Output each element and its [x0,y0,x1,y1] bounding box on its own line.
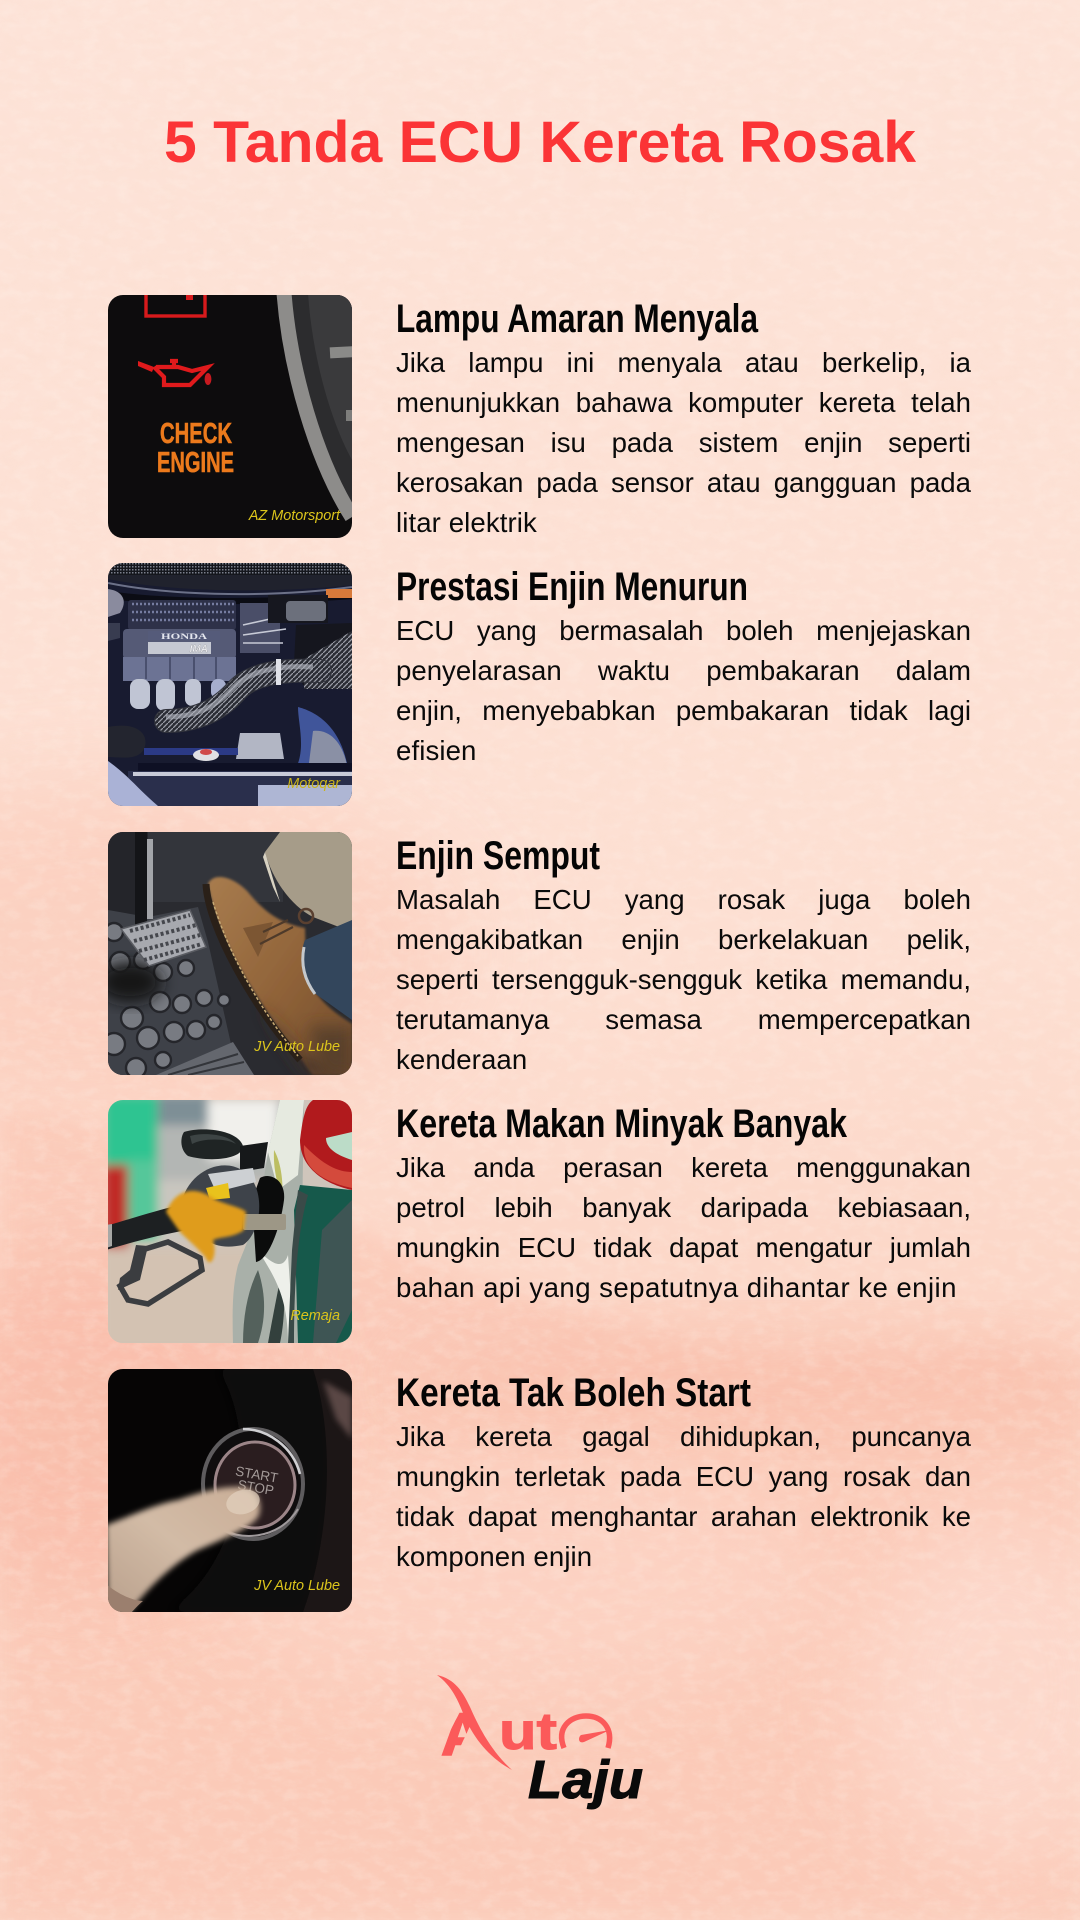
body text: Jika kereta gagal dihidupkan, puncanya [396,1421,971,1452]
heading: Prestasi Enjin Menurun [396,565,748,609]
body text: enjin, menyebabkan pembakaran tidak lagi [396,695,971,726]
photo: engine bay: IMA [190,644,208,655]
heading: Kereta Tak Boleh Start [396,1371,751,1415]
photo: engine bay: HONDA [161,632,207,641]
body text: efisien [396,735,476,766]
panel: prestasi enjin [108,563,971,806]
body text: Masalah ECU yang rosak juga boleh [396,884,971,915]
photo: check engine dashboard: ENGINE [157,447,234,479]
photo: foot on pedal: JV Auto Lube [253,1039,340,1055]
panel: tak boleh start [108,1369,971,1612]
body text: Jika lampu ini menyala atau berkelip, ia [396,347,971,378]
body text: mungkin terletak pada ECU yang rosak dan [396,1461,971,1492]
photo: fuel nozzle [108,1100,352,1343]
body text: terutamanya semasa mempercepatkan [396,1004,971,1035]
title: 5 Tanda ECU Kereta Rosak [164,110,917,175]
photo: foot on pedal [108,832,352,1075]
body text: mengakibatkan enjin berkelakuan pelik, [396,924,971,955]
body text: litar elektrik [396,507,537,538]
body text [396,1421,971,1572]
panel: enjin semput [108,832,971,1075]
logo: Auto Laju: A [441,1701,484,1768]
photo: start button: STOP [236,1477,275,1498]
body text: tidak dapat menghantar arahan elektronik ke [396,1501,971,1532]
body text [396,347,971,538]
body text: ECU yang bermasalah boleh menjejaskan [396,615,971,646]
logo: Auto Laju [437,1675,643,1810]
photo: fuel nozzle: Remaja [290,1308,340,1324]
logo: Auto Laju: ut [499,1703,557,1761]
body text [396,1152,971,1303]
body text: Jika anda perasan kereta menggunakan [396,1152,971,1183]
panel: lampu amaran [108,295,971,538]
panel: kereta makan minyak [108,1100,971,1343]
body text: mungkin ECU tidak dapat mengatur jumlah [396,1232,971,1263]
body text: bahan api yang sepatutnya dihantar ke enjin [396,1272,957,1303]
body text: penyelarasan waktu pembakaran dalam [396,655,971,686]
photo: start button: JV Auto Lube [253,1578,340,1594]
photo: engine bay [108,563,352,806]
photo: check engine dashboard: CHECK [160,418,232,450]
logo: Auto Laju: Laju [528,1750,643,1810]
heading: Lampu Amaran Menyala [396,297,759,341]
body text: kenderaan [396,1044,527,1075]
body text: seperti tersengguk-sengguk ketika memandu, [396,964,971,995]
photo: check engine dashboard [108,295,352,538]
photo: check engine dashboard: AZ Motorsport [248,508,341,524]
heading: Enjin Semput [396,834,600,878]
body text: komponen enjin [396,1541,592,1572]
body text [396,615,971,766]
body text: mengesan isu pada sistem enjin seperti [396,427,971,458]
photo: start button: START [234,1463,279,1486]
body text: petrol lebih banyak daripada kebiasaan, [396,1192,971,1223]
body text: menunjukkan bahawa komputer kereta telah [396,387,971,418]
body text [396,884,971,1075]
photo: engine bay: Motoqar [287,776,341,792]
body text: kerosakan pada sensor atau gangguan pada [396,467,971,498]
heading: Kereta Makan Minyak Banyak [396,1102,848,1146]
photo: start button [108,1369,352,1612]
